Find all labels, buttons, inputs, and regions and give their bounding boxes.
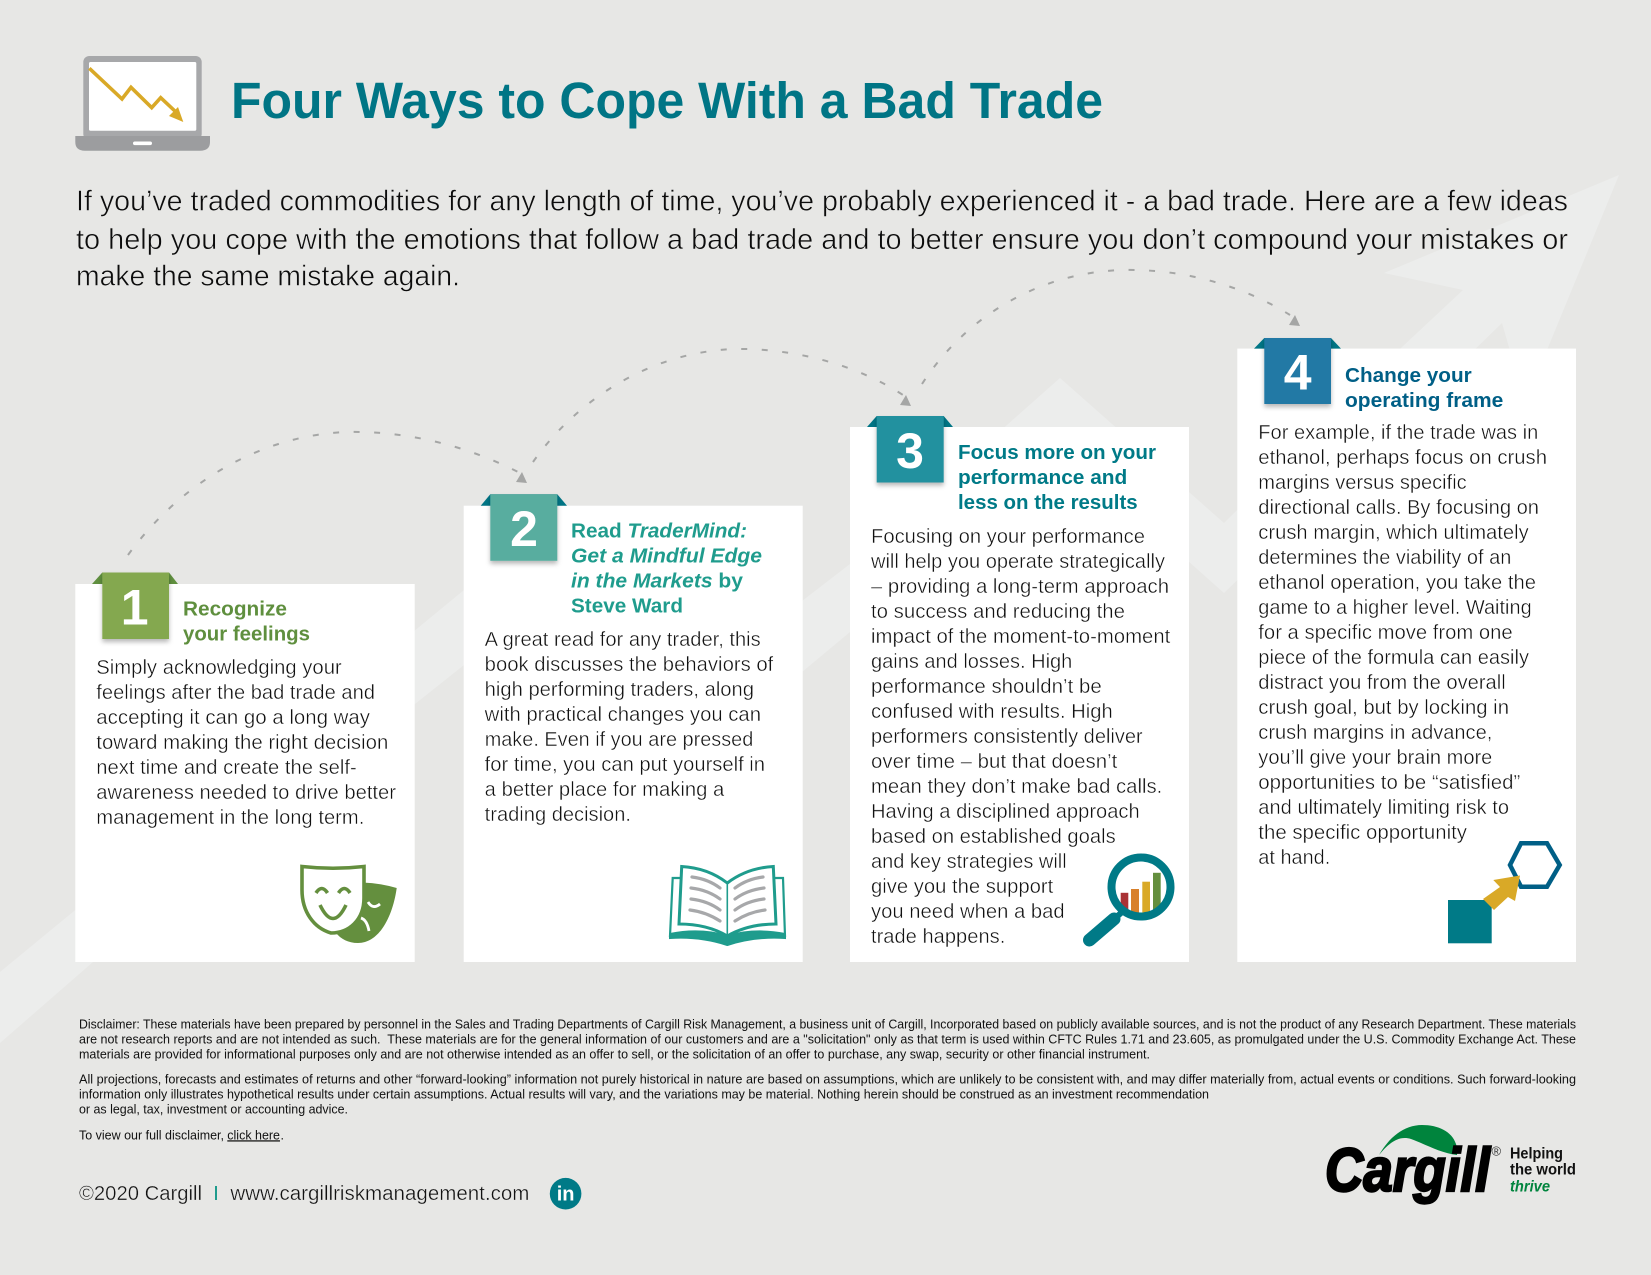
body text: step 4: for a specific move from one (1258, 622, 1513, 644)
body text: step 4: ethanol, perhaps focus on crush (1258, 447, 1547, 469)
body text: step 3: performance shouldn’t be (871, 676, 1102, 698)
body text: step 3: – providing a long-term approach (871, 576, 1169, 598)
badge: number 2 (481, 494, 567, 561)
heading: step 2: Read TraderMind: (571, 520, 747, 542)
heading: step 2 (571, 520, 762, 618)
heading: step 4 (1345, 364, 1503, 412)
body text: step 3: Focusing on your performance (871, 526, 1145, 548)
heading: step 2: Get a Mindful Edge (571, 544, 762, 568)
body text: step 2: a better place for making a (485, 779, 725, 801)
disclaimer text block (79, 1017, 1576, 1142)
body text: step 4 (1258, 422, 1547, 869)
heading: step 3: Focus more on your (958, 441, 1156, 464)
body text: step 3: give you the support (871, 876, 1054, 898)
body text: step 4: crush goal, but by locking in (1258, 697, 1509, 719)
body text: step 4: and ultimately limiting risk to (1258, 797, 1509, 819)
body text: step 1: management in the long term. (96, 807, 364, 829)
tagline (1510, 1146, 1576, 1196)
badge: number 3: 3 (896, 423, 924, 479)
body text: step 3 (870, 526, 1171, 948)
body text: step 4: the specific opportunity (1258, 822, 1467, 844)
body text: step 4: directional calls. By focusing on (1258, 497, 1539, 519)
disclaimer text block: . (280, 1128, 284, 1142)
disclaimer text block: Disclaimer: These materials have been prepared by personnel in the Sales and Trading Departments of Cargill Risk Management, a business unit of Cargill, Incorporated based on publicly available sources, and is not the product of any Research Department. These materials (79, 1017, 1576, 1031)
cargill logo: ® (1492, 1144, 1502, 1158)
body text: step 3: to success and reducing the (871, 601, 1125, 623)
body text: step 1: next time and create the self- (96, 757, 357, 779)
icon: linkedin: in (557, 1184, 574, 1206)
body text: step 4: margins versus specific (1258, 472, 1467, 494)
heading: step 3: performance and (958, 466, 1127, 489)
background watermark arrow (0, 175, 1619, 1043)
body text: step 2: A great read for any trader, this (485, 629, 761, 651)
badge: number 2: 2 (510, 501, 538, 557)
icon: magnifier over bar chart (1090, 858, 1170, 940)
disclaimer text block: materials are provided for informational purposes only and are not otherwise intended as an offer to sell, or the solicitation of an offer to purchase, any swap, security or other financial instrument. (79, 1047, 1150, 1061)
panel: step 2 read tradermind (464, 494, 803, 962)
arrow: dashed step 3 to 4 (922, 270, 1300, 384)
panel: step 1 recognize your feelings (75, 572, 415, 962)
body text: step 1: toward making the right decision (96, 732, 388, 754)
intro text block: If you’ve traded commodities for any length of time, you’ve probably experienced it - a bad trade. Here are a few ideas (76, 186, 1568, 218)
footer copyright and website: www.cargillriskmanagement.com (229, 1183, 529, 1205)
cargill logo: Cargill (1325, 1136, 1491, 1204)
body text: step 4: For example, if the trade was in (1258, 422, 1538, 444)
footer copyright and website: ©2020 Cargill (79, 1183, 202, 1205)
body text: step 3: based on established goals (871, 826, 1116, 848)
body text: step 4: at hand. (1258, 847, 1330, 869)
body text: step 4: opportunities to be “satisfied” (1258, 772, 1520, 794)
body text: step 1: accepting it can go a long way (96, 707, 370, 729)
disclaimer text block: are not research reports and are not intended as such. These materials are for the general information of our customers and are a "solicitation" only as that term is used within CFTC Rules 1.71 and 23.605, as promulgated under the U.S. Commodity Exchange Act. These (79, 1032, 1576, 1046)
disclaimer text block: information only illustrates hypothetical results under certain assumptions. Actual results will vary, and the variations may be material. Nothing herein should be construed as an investment recommendation (79, 1087, 1209, 1101)
body text: step 3: and key strategies will (871, 851, 1067, 873)
body text: step 4: determines the viability of an (1258, 547, 1511, 569)
disclaimer text block: click here (227, 1128, 280, 1142)
body text: step 1: Simply acknowledging your (96, 657, 342, 679)
tagline: Helping (1510, 1146, 1563, 1163)
body text: step 3: Having a disciplined approach (871, 801, 1140, 823)
heading: step 2: Steve Ward (571, 594, 683, 618)
body text: step 1: feelings after the bad trade and (96, 682, 375, 704)
panel: step 4 change operating frame (1237, 338, 1576, 962)
badge: number 4 (1254, 338, 1341, 404)
body text: step 2: with practical changes you can (484, 704, 761, 726)
heading: step 3: less on the results (958, 491, 1138, 514)
title: Four Ways to Cope With a Bad Trade (231, 72, 1103, 129)
intro text block: make the same mistake again. (76, 261, 460, 293)
body text: step 3: gains and losses. High (871, 651, 1072, 673)
icon: theater masks (302, 866, 397, 943)
intro text block (76, 186, 1568, 293)
body text: step 3: confused with results. High (871, 701, 1113, 723)
body text: step 4: game to a higher level. Waiting (1258, 597, 1532, 619)
badge: number 4: 4 (1284, 344, 1312, 400)
heading: step 4: Change your (1345, 364, 1472, 387)
badge: number 1: 1 (121, 580, 149, 636)
title icon: laptop with falling chart (75, 56, 210, 151)
body text: step 4: piece of the formula can easily (1258, 647, 1529, 669)
disclaimer text block: or as legal, tax, investment or accounting advice. (79, 1102, 348, 1116)
tagline: thrive (1510, 1179, 1550, 1196)
body text: step 3: performers consistently deliver (871, 726, 1143, 748)
body text: step 2: for time, you can put yourself in (485, 754, 765, 776)
body text: step 4: you’ll give your brain more (1258, 747, 1492, 769)
badge: number 1 (92, 572, 178, 639)
icon: linkedin (550, 1178, 581, 1209)
heading: step 1 (183, 598, 310, 646)
heading: step 1: Recognize (183, 598, 287, 621)
body text: step 4: crush margin, which ultimately (1258, 522, 1529, 544)
body text: step 3: trade happens. (871, 926, 1005, 948)
tagline: the world (1510, 1161, 1576, 1178)
body text: step 3: you need when a bad (871, 901, 1065, 923)
body text: step 2: book discusses the behaviors of (485, 654, 774, 676)
intro text block: to help you cope with the emotions that follow a bad trade and to better ensure you don’t compound your mistakes or (76, 224, 1568, 256)
footer copyright and website (79, 1183, 529, 1205)
heading: step 2: in the Markets by (571, 570, 744, 592)
icon: open book (670, 866, 785, 945)
body text: step 3: mean they don’t make bad calls. (871, 776, 1162, 798)
body text: step 2: trading decision. (485, 804, 631, 826)
panel: step 3 focus on performance (850, 416, 1189, 962)
body text: step 1: awareness needed to drive better (96, 782, 396, 804)
badge: number 3 (867, 416, 953, 482)
body text: step 4: crush margins in advance, (1258, 722, 1492, 744)
body text: step 4: distract you from the overall (1258, 672, 1506, 694)
body text: step 3: over time – but that doesn’t (871, 751, 1118, 773)
body text: step 3: impact of the moment-to-moment (871, 626, 1171, 648)
icon: square to hexagon with arrow (1448, 843, 1560, 943)
body text: step 1 (96, 657, 396, 829)
body text: step 4: ethanol operation, you take the (1258, 572, 1536, 594)
heading: step 3 (958, 441, 1156, 514)
disclaimer text block: All projections, forecasts and estimates of returns and other “forward-looking” information not purely historical in nature are based on assumptions, which are unlikely to be consistent with, and may differ materially from, actual events or conditions. Such forward-looking (79, 1072, 1576, 1086)
body text: step 2: make. Even if you are pressed (485, 729, 753, 751)
body text: step 2 (484, 629, 774, 826)
arrow: dashed step 1 to 2 (128, 432, 527, 555)
disclaimer text block: To view our full disclaimer, (79, 1128, 224, 1142)
arrow: dashed step 2 to 3 (533, 349, 911, 462)
body text: step 3: will help you operate strategically (870, 551, 1165, 573)
heading: step 4: operating frame (1345, 389, 1503, 412)
heading: step 1: your feelings (183, 623, 310, 646)
body text: step 2: high performing traders, along (485, 679, 754, 701)
